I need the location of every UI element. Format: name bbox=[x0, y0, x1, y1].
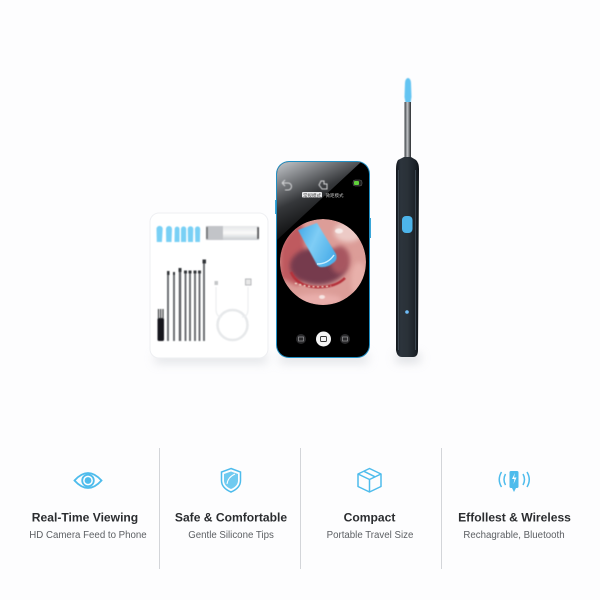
camera controls bbox=[296, 334, 306, 344]
icon: box bbox=[358, 468, 381, 492]
ground shadows bbox=[155, 354, 420, 363]
smartphone: 常规模式 bbox=[303, 192, 321, 199]
description: Portable Travel Size bbox=[327, 530, 413, 541]
heading: Safe & Comfortable bbox=[175, 510, 287, 524]
power button bbox=[402, 216, 412, 233]
handle bbox=[396, 157, 419, 357]
battery indicator bbox=[353, 180, 362, 186]
feature: Real-Time Viewing bbox=[29, 473, 147, 541]
cleaning tools bbox=[158, 260, 206, 341]
otoscope device bbox=[396, 78, 419, 357]
smartphone: 微距模式 bbox=[326, 192, 344, 199]
heading: Real-Time Viewing bbox=[32, 510, 138, 524]
description: Gentle Silicone Tips bbox=[188, 530, 274, 541]
mode tabs bbox=[302, 192, 322, 198]
top bar icons bbox=[282, 180, 327, 190]
feature: Effollest & Wireless bbox=[458, 471, 571, 541]
smartphone bbox=[275, 161, 371, 358]
divider bbox=[159, 448, 160, 569]
phone frame bbox=[276, 161, 370, 358]
icon: wireless charging bbox=[499, 471, 529, 492]
icon: shield bbox=[222, 468, 240, 492]
screen bbox=[277, 162, 369, 357]
endoscope tip bbox=[298, 223, 337, 267]
shaft bbox=[404, 102, 411, 157]
box panel bbox=[150, 213, 268, 358]
side buttons bbox=[275, 200, 276, 214]
storage tube bbox=[206, 226, 259, 240]
description: Rechagrable, Bluetooth bbox=[463, 530, 565, 541]
feature: Compact bbox=[327, 468, 413, 541]
divider bbox=[441, 448, 442, 569]
icon: eye bbox=[74, 473, 102, 488]
heading: Effollest & Wireless bbox=[458, 510, 571, 524]
description: HD Camera Feed to Phone bbox=[29, 530, 147, 541]
screen glare bbox=[277, 162, 361, 240]
heading: Compact bbox=[344, 510, 395, 524]
silicone ear tips bbox=[156, 226, 200, 242]
accessory kit box bbox=[150, 213, 268, 358]
ear camera view bbox=[280, 219, 367, 306]
device tip bbox=[404, 78, 412, 103]
LED bbox=[405, 310, 409, 314]
divider bbox=[300, 448, 301, 569]
brush bbox=[158, 318, 164, 341]
feature: Safe & Comfortable bbox=[175, 468, 287, 541]
USB cable bbox=[214, 279, 251, 340]
